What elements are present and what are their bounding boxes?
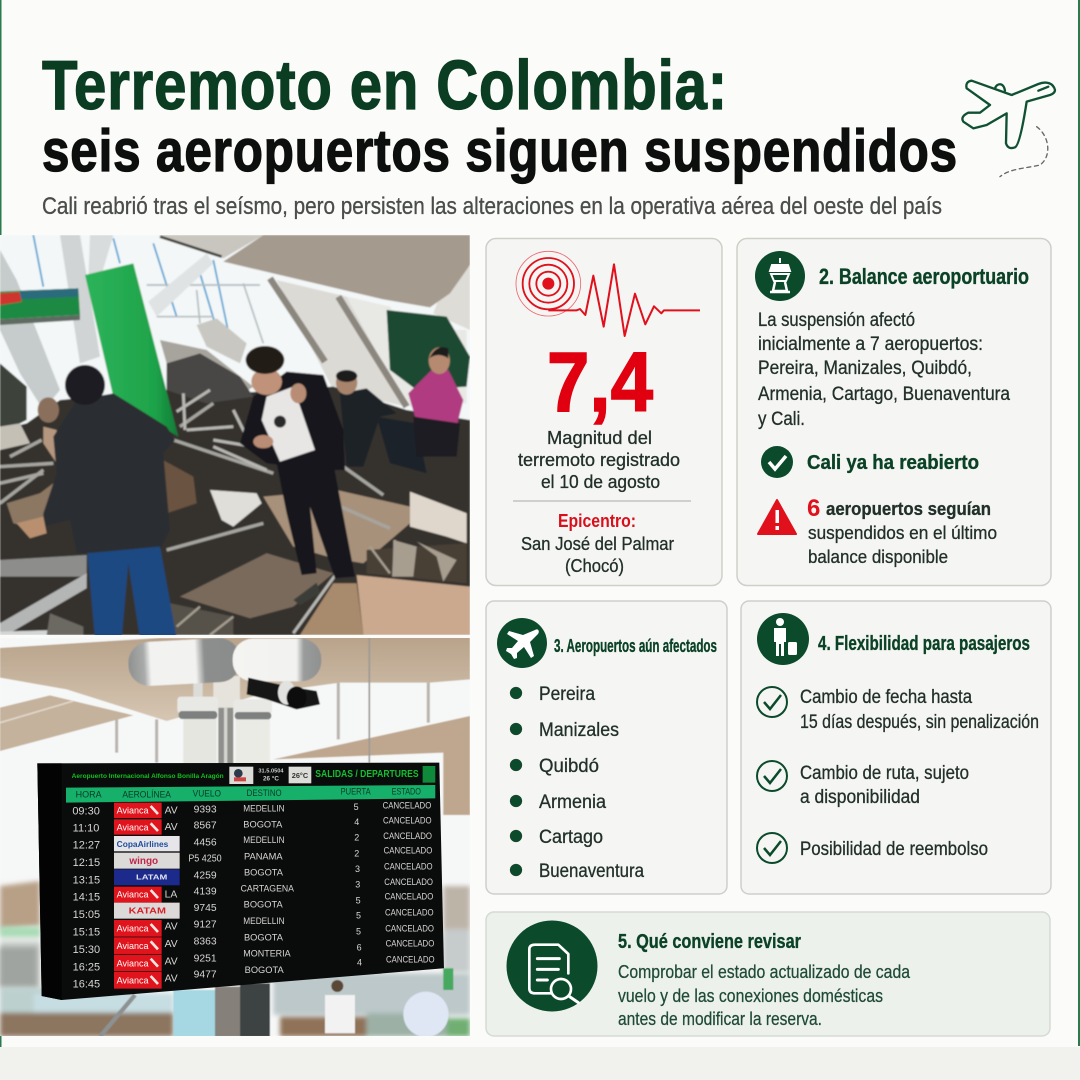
board rows: 8567 [194,821,217,832]
panel: passenger flexibility [741,601,1051,894]
board rows: Avianca [117,924,148,934]
board rows: 5 [356,895,361,905]
board rows: CANCELADO [384,862,433,872]
board rows: 11:10 [73,823,99,835]
board rows: CANCELADO [383,831,432,841]
magnitude description: terremoto registrado [518,450,680,470]
body text: La suspensión afectó [758,310,915,331]
airport list: Quibdó [539,755,599,777]
board rows: 13:15 [73,874,100,886]
board rows: 4456 [194,837,217,848]
board rows: 5 [354,802,359,812]
body text: antes de modificar la reserva. [618,1008,822,1029]
photo: departures board in airport hall [0,636,470,1037]
board rows: MONTERIA [243,948,291,958]
departures board screen: 31.5.0504 [258,769,284,775]
reopened note: Cali ya ha reabierto [807,452,979,474]
panel: what to check [486,912,1050,1036]
board rows: 15:05 [73,909,100,921]
board rows: Avianca [117,976,148,986]
board rows: 4259 [194,870,217,881]
option: date change: Cambio de fecha hasta [800,687,972,708]
icon: passenger with luggage [757,613,809,665]
board rows: CopaAirlines [117,840,169,849]
suspended note: aeropuertos seguían [826,498,991,519]
icon: control tower [755,251,805,301]
heading: 5. Qué conviene revisar [618,931,801,953]
board rows: 5 [356,911,361,921]
board rows: LATAM [136,873,167,882]
epicentre [521,511,674,576]
body text: Comprobar el estado actualizado de cada [618,961,911,982]
body text: y Cali. [758,409,805,430]
panel: airport balance [737,238,1051,586]
board rows: CANCELADO [383,816,432,826]
icon: airplane with dashed route [962,81,1055,177]
board rows: AV [165,974,178,985]
board rows: CANCELADO [384,877,433,887]
board rows: 12:27 [73,840,100,852]
epicentre: (Chocó) [565,556,624,576]
departures board screen: PUERTA [341,787,371,797]
icon: warning triangle [758,500,796,534]
board rows: 15:30 [73,944,100,956]
board rows: CARTAGENA [241,883,294,893]
epicentre: San José del Palmar [521,534,674,554]
board rows: BOGOTA [244,868,283,878]
lower hall [0,927,470,1037]
board rows: 3 [355,864,360,874]
suspended note: 6 [807,495,820,522]
ceiling [0,636,470,721]
icon: document with magnifier [506,920,598,1012]
departures board screen [37,763,444,1000]
airport list: Manizales [539,719,619,741]
board rows: CANCELADO [385,908,434,918]
board rows: Avianca [117,958,148,968]
board rows: CANCELADO [385,892,433,902]
board rows: 3 [355,880,360,890]
board rows: wingo [128,856,158,867]
board rows: 9127 [194,920,217,931]
option: refund: Posibilidad de reembolso [800,839,988,860]
board rows: 9251 [194,953,217,964]
body text: inicialmente a 7 aeropuertos: [758,334,983,355]
board rows [72,801,435,991]
board rows: BOGOTA [245,965,284,975]
suspended note: balance disponible [808,546,948,567]
icon: plane [497,618,547,668]
departures board screen: DESTINO [247,788,282,798]
subtitle: Cali reabrió tras el seísmo, pero persisten las alteraciones en la operativa aérea del oeste del país [42,193,942,220]
departures board screen: ESTADO [392,786,421,796]
board rows: BOGOTA [244,933,283,943]
left wall below the board top [0,881,470,989]
option: refund [757,833,988,863]
board rows: 4 [357,958,362,968]
body text [618,961,911,1029]
board rows: AV [165,939,178,950]
airport list [510,683,644,882]
board rows: 9477 [194,970,217,981]
board rows: Avianca [117,806,148,816]
option: date change: 15 días después, sin penalización [800,712,1039,733]
departures board screen: 26 °C [263,775,279,783]
woman [240,372,345,470]
secondary figures [340,388,397,467]
board rows: 4 [354,817,359,827]
airport list: Armenia [539,791,606,813]
title: Terremoto en Colombia: [42,46,728,124]
board rows: Avianca [117,890,148,900]
board rows: 6 [357,942,362,952]
board rows: 9393 [194,805,217,816]
option: route change: Cambio de ruta, sujeto [800,763,969,784]
option: route change: a disponibilidad [800,787,920,808]
panel: airports still affected [486,601,727,894]
departures board screen: 26°C [292,771,309,780]
board rows: P5 4250 [188,854,222,865]
board rows: PANAMA [244,851,283,861]
board rows: AV [165,822,178,833]
magnitude value: 7,4 [547,335,653,429]
airport list: Buenaventura [539,860,644,882]
panel: earthquake magnitude [486,238,722,586]
board rows: 5 [356,926,361,936]
magnitude description: el 10 de agosto [541,472,660,492]
board rows: 16:45 [73,979,100,991]
board rows: BOGOTA [244,900,283,910]
heading: 2. Balance aeroportuario [819,264,1029,289]
body text: Pereira, Manizales, Quibdó, [758,358,972,379]
board rows: LA [165,890,177,901]
icon: seismic rings and wave [516,251,700,336]
board rows: 15:15 [73,926,100,938]
board rows: 12:15 [73,857,100,869]
board rows: CANCELADO [385,923,434,933]
heading: 3. Aeropuertos aún afectados [554,636,717,656]
airport list: Cartago [539,826,603,848]
board rows: CANCELADO [384,846,432,856]
body text: Armenia, Cartago, Buenaventura [758,384,1010,405]
board rows: CANCELADO [383,801,431,811]
suspended note: suspendidos en el último [808,522,997,543]
board rows: CANCELADO [386,954,435,964]
board rows: 9745 [194,903,217,914]
board rows: AV [165,922,178,933]
icon: check [761,446,793,478]
departures board screen: VUELO [193,789,221,799]
board rows: KATAM [129,906,166,916]
board rows: 4139 [194,887,217,898]
board rows: CANCELADO [386,938,434,948]
departures board screen: Aeropuerto Internacional Alfonso Bonilla Aragón [72,773,224,780]
board rows: BOGOTA [243,820,282,830]
body text [758,310,1010,430]
board rows: Avianca [117,822,148,832]
board rows: 2 [354,833,359,843]
photo: collapsed airport terminal with people in rubble [0,235,470,638]
board rows: 14:15 [73,892,100,904]
cameras [127,637,241,687]
board rows: MEDELLIN [243,835,285,845]
board rows: AV [165,805,178,816]
board rows: Avianca [117,941,148,951]
departures board screen: AEROLÍNEA [122,789,171,799]
departures board screen: SALIDAS / DEPARTURES [315,769,419,780]
board rows: 09:30 [72,806,100,818]
magnitude description [518,428,680,492]
body text: vuelo y de las conexiones domésticas [618,985,883,1006]
epicentre: Epicentro: [558,511,636,531]
magnitude description: Magnitud del [547,428,652,448]
board rows: 2 [354,849,359,859]
suspended note [807,495,997,567]
board rows: MEDELLIN [243,803,285,813]
stand [218,708,233,764]
departures board screen: HORA [76,790,102,800]
title [42,46,958,184]
airport list: Pereira [539,683,595,705]
option: route change [757,761,969,808]
board rows: MEDELLIN [243,916,285,926]
board rows: 8363 [194,937,217,948]
board rows: 16:25 [73,961,100,973]
man [43,393,175,553]
board rows: AV [165,956,178,967]
option: date change [757,687,1039,733]
